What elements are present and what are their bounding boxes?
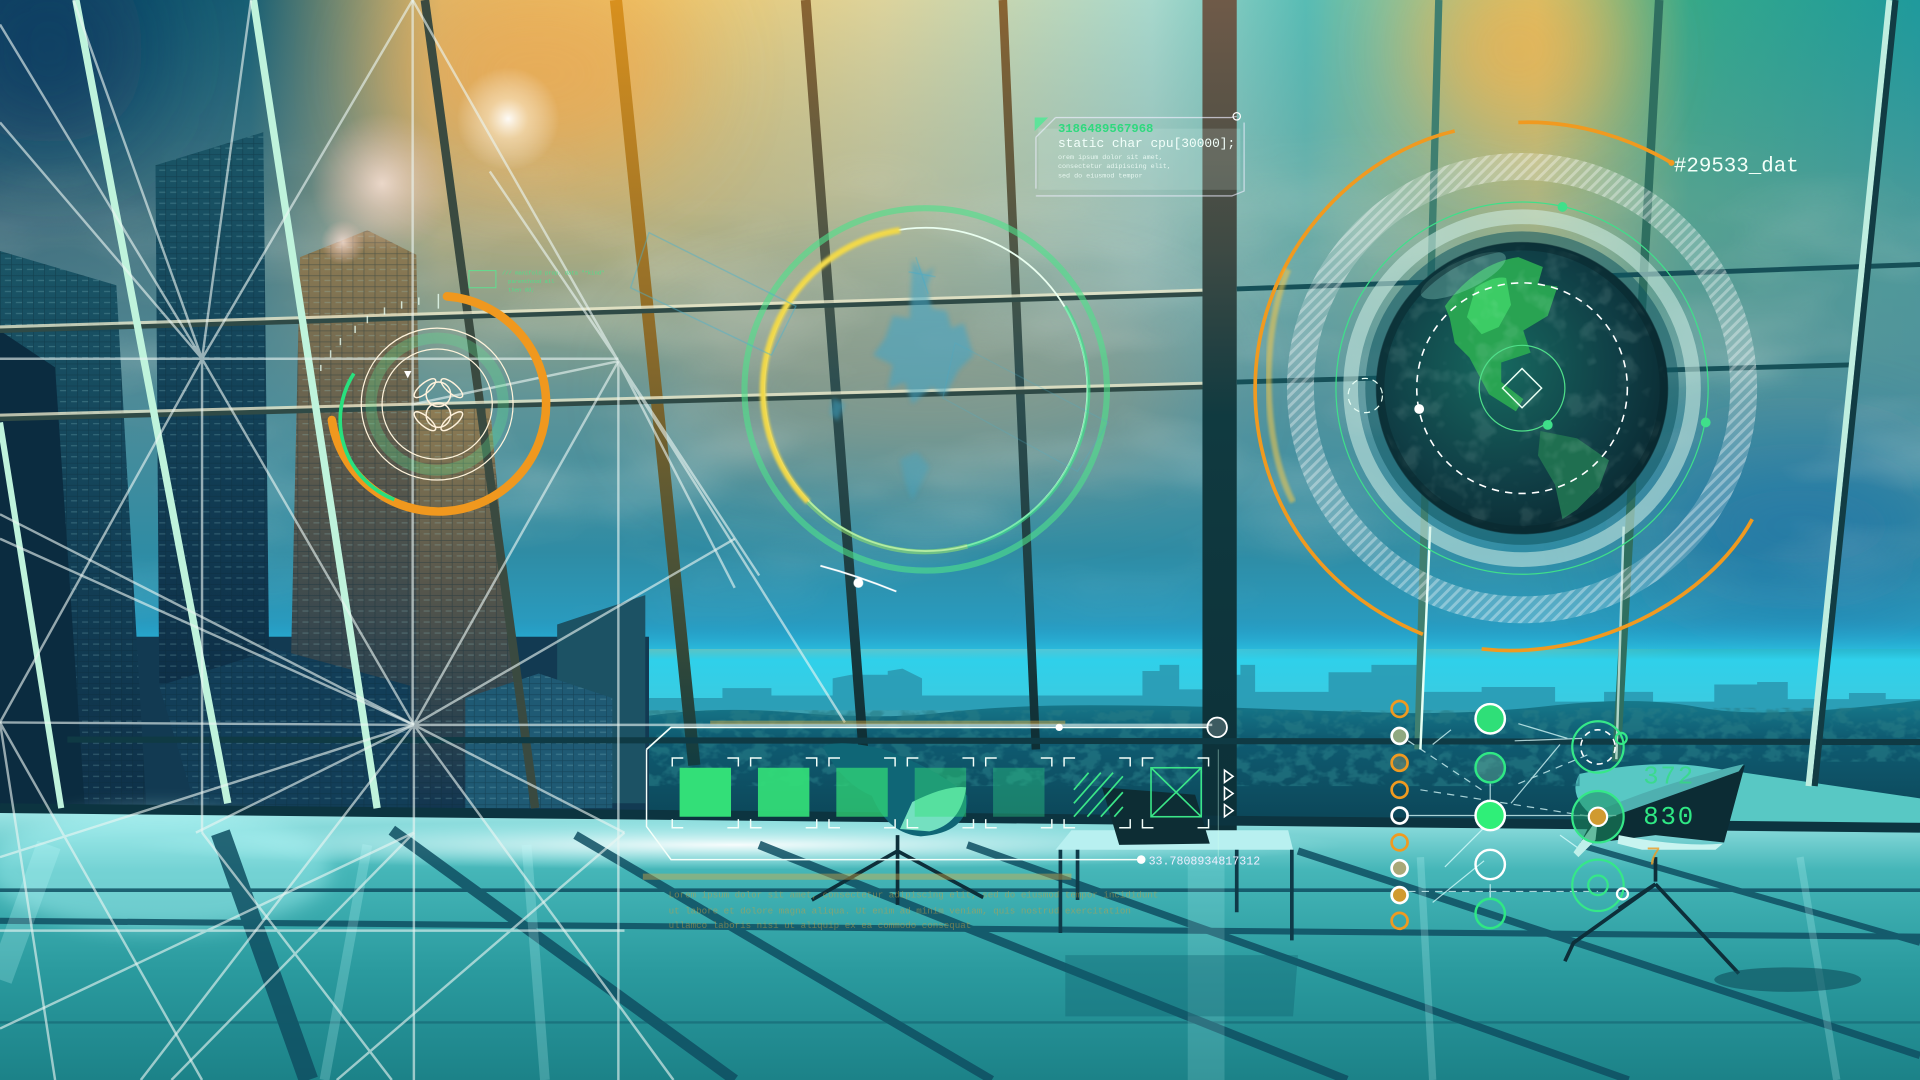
faded orange text: ut labore et dolore magna aliqua. Ut enim ad minim veniam, quis nostrud exercitation [669,905,1131,916]
right HUD: globe: #29533_dat [1674,155,1799,178]
code panel: consectetur adipiscing elit, [1058,163,1171,171]
bottom HUD panel: 33.7808934817312 [1149,855,1260,868]
bottom HUD panel [643,718,1260,931]
readout [1137,855,1146,864]
code panel: sed do eiusmod tempor [1058,173,1143,181]
small label: /// manifold prop. data "*kind" [502,269,604,276]
pointer [404,371,411,378]
data tag [1668,160,1674,166]
brain icon [411,376,465,434]
left HUD: brain gauge [321,269,604,511]
connector lines [1408,724,1616,902]
code panel [1035,113,1244,196]
distant city skyline [649,665,1920,719]
left towers [0,132,649,820]
readout numbers: 372 [1643,763,1695,792]
faded orange text [669,890,1158,931]
orbit nodes [1558,202,1567,212]
readout numbers: 7 [1646,843,1661,872]
orange arcs [1255,131,1455,634]
sun lens flares [311,67,560,264]
code panel: 3186489567968 [1058,122,1153,136]
green orbit [1336,202,1708,574]
large target circles [1572,721,1628,911]
glass table and laptop [1056,787,1298,1016]
tree line and river [637,700,1920,823]
right HUD: globe [1255,122,1799,651]
crossed block [1151,768,1201,817]
tick scale [321,294,438,371]
green inner arc [340,373,394,500]
dashed white orbit [1417,283,1627,493]
code panel: static char cpu[30000]; [1058,136,1235,151]
faded orange text: ullamco laboris nisi ut aliquip ex ea commodo consequat [669,920,971,931]
lounge chair right [1565,764,1861,992]
lounge chair left [812,743,983,905]
solid pale rings [1351,217,1693,560]
small label [469,269,604,293]
readout numbers: 830 [1643,803,1695,832]
faded orange text: Lorem ipsum dolor sit amet, consectetur adipiscing elit, sed do eiusmod tempor incididunt [669,890,1158,901]
small label: parenthood all [508,278,554,285]
blue fractal drone [830,260,973,501]
play triangles [1224,770,1233,817]
land: north america [1445,257,1558,411]
progress blocks [680,768,1044,817]
faint blue schematic [631,233,1108,471]
white streak [820,566,896,591]
small node column [1392,701,1408,929]
hatched block [1074,773,1123,817]
code panel: orem ipsum dolor sit amet, [1058,154,1163,162]
medium node column [1476,704,1505,928]
hatched ring [1300,167,1744,610]
small label: then dd; [508,286,535,293]
concentric rings [361,328,513,480]
right node network [1392,701,1695,929]
readout numbers [1643,763,1695,872]
white triangulated net [0,0,1212,1080]
center HUD: scanner ring [631,208,1108,591]
window frame: mullions [0,0,1920,833]
orange bars [710,721,1065,724]
crosshair rings [1479,345,1565,431]
globe body [1376,242,1668,534]
orange progress arc [332,296,546,511]
atmosphere texture [1379,245,1665,531]
land: south america [1538,431,1609,519]
corner brackets [672,758,1209,828]
floor [0,808,1920,1080]
